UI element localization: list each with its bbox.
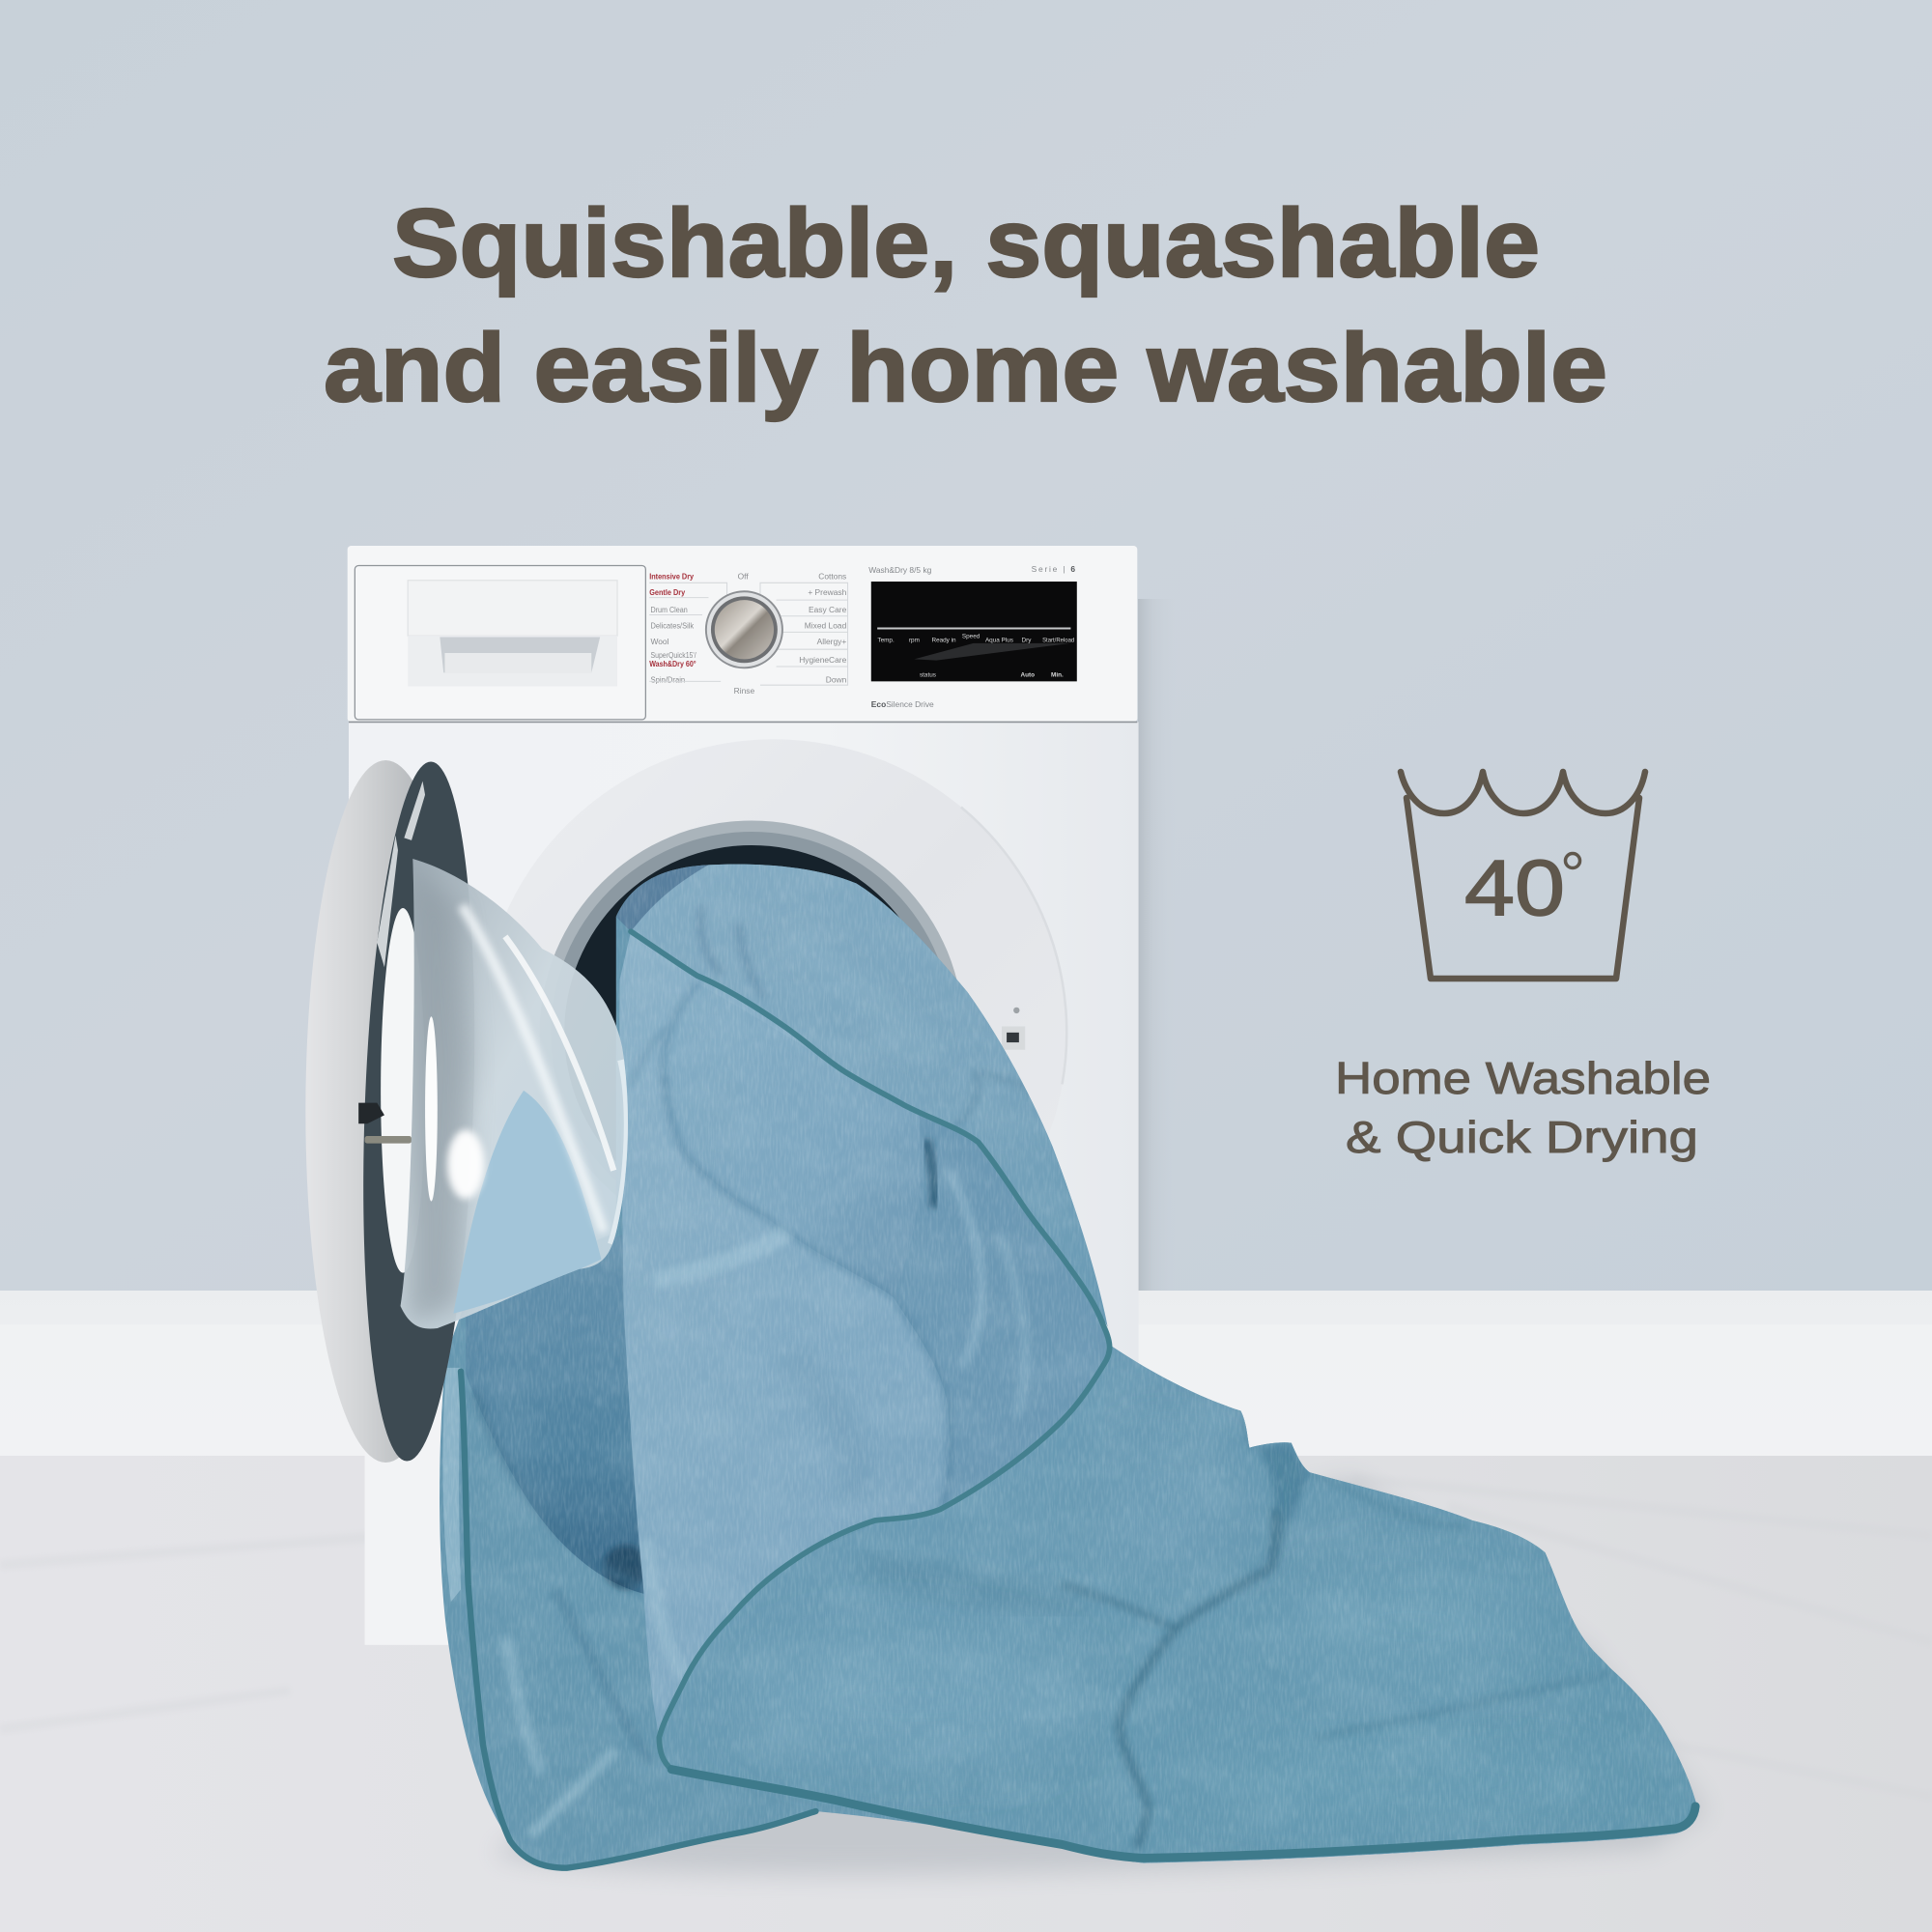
service port [1002,1008,1025,1050]
photo scene: washing machine with duvet [305,546,1707,1875]
programme labels right: Down [826,675,847,685]
display: Min. [1051,671,1064,678]
machine lower base [365,1417,475,1645]
drum opening [564,845,939,1220]
programme labels right: Allergy+ [817,637,846,646]
model text: Wash&Dry 8/5 kg [868,565,932,575]
display: Auto [1021,671,1035,678]
skirting board [0,1291,1932,1456]
linen sheen [489,1165,1675,1821]
dial labels [734,571,754,696]
display: status [920,671,936,678]
detergent drawer [355,565,645,720]
duvet floor section [659,1345,1697,1863]
door stickers [377,781,425,967]
display: rpm [909,638,920,644]
door window [381,908,425,1273]
duvet inner folds [442,1368,650,1836]
lobe seams [631,983,950,1506]
programme labels right: Cottons [818,571,846,581]
duvet back fabric [616,865,708,931]
open door [305,760,629,1463]
duvet silhouette base [440,865,1697,1868]
degree sign [1565,854,1580,867]
title [324,189,1607,422]
duvet floor shadow [493,1479,1707,1875]
caption line 2: & Quick Drying [1346,1112,1698,1162]
display: Ready in [931,638,956,644]
door dark ring [353,760,485,1463]
programme labels right: Easy Care [809,605,847,614]
linen texture [431,850,1700,1873]
programme dial [706,591,782,668]
wall background [0,0,1932,1294]
drum bezel [480,739,1067,1325]
programme labels left: Intensive Dry [649,571,694,581]
column highlights [647,1233,855,1676]
duvet [431,850,1700,1873]
glass bowl [401,859,629,1329]
display: Aqua Plus [985,638,1013,644]
display: Dry [1022,638,1032,644]
display: Temp. [877,638,895,644]
control panel [348,546,1137,722]
model text [868,564,1077,709]
caption [1335,1053,1711,1162]
dial labels: Off [738,571,749,581]
duvet trim piping [461,931,1695,1868]
door glass slit [425,1016,438,1202]
door latch [358,1103,412,1144]
tub outline [1401,772,1645,979]
programme labels left: Drum Clean [650,605,688,614]
title line 1: Squishable, squashable [392,189,1540,298]
programme labels left: Delicates/Silk [650,621,695,631]
programme labels left: Wool [650,637,669,646]
inner glass shade [409,863,470,1324]
drum gasket [540,820,963,1244]
programme labels left: SuperQuick15'/ [650,650,696,660]
display: Speed [962,634,980,640]
fabric seen through glass [453,1091,601,1314]
programme labels left: Spin/Drain [650,675,685,685]
title line 2: and easily home washable [324,314,1607,422]
programme bracket lines [649,582,848,685]
duvet satin fold strip [894,1115,1110,1508]
door silver rim [305,760,466,1463]
programme labels right [799,571,847,685]
temperature: 40 [1464,844,1565,932]
display: Start/Reload [1042,638,1075,644]
machine body [349,722,1139,1363]
programme labels right: + Prewash [808,587,847,597]
duvet main lobe [663,983,921,1297]
model text: Serie | 6 [1032,564,1077,574]
dial labels: Rinse [734,686,754,696]
programme labels left: Gentle Dry [649,587,685,597]
duvet inner pillow [466,1233,653,1596]
icon: wash tub 40 degrees [1401,772,1645,979]
programme labels right: HygieneCare [799,655,847,665]
caption line 1: Home Washable [1335,1053,1711,1103]
duvet centre column [619,931,1110,1737]
head folds [700,905,1037,1127]
model text: EcoSilence Drive [871,699,934,709]
programme labels right: Mixed Load [805,621,847,631]
floor section quilting [739,1410,1614,1848]
wall shadow beside machine [1138,599,1177,1291]
programme labels left [649,571,696,685]
display [871,582,1077,681]
programme labels left: Wash&Dry 60° [649,659,696,668]
duvet head section [631,865,1108,1327]
floor [0,1456,1932,1932]
satin fold highlights [926,1140,1026,1417]
washing machine [348,546,1139,1645]
